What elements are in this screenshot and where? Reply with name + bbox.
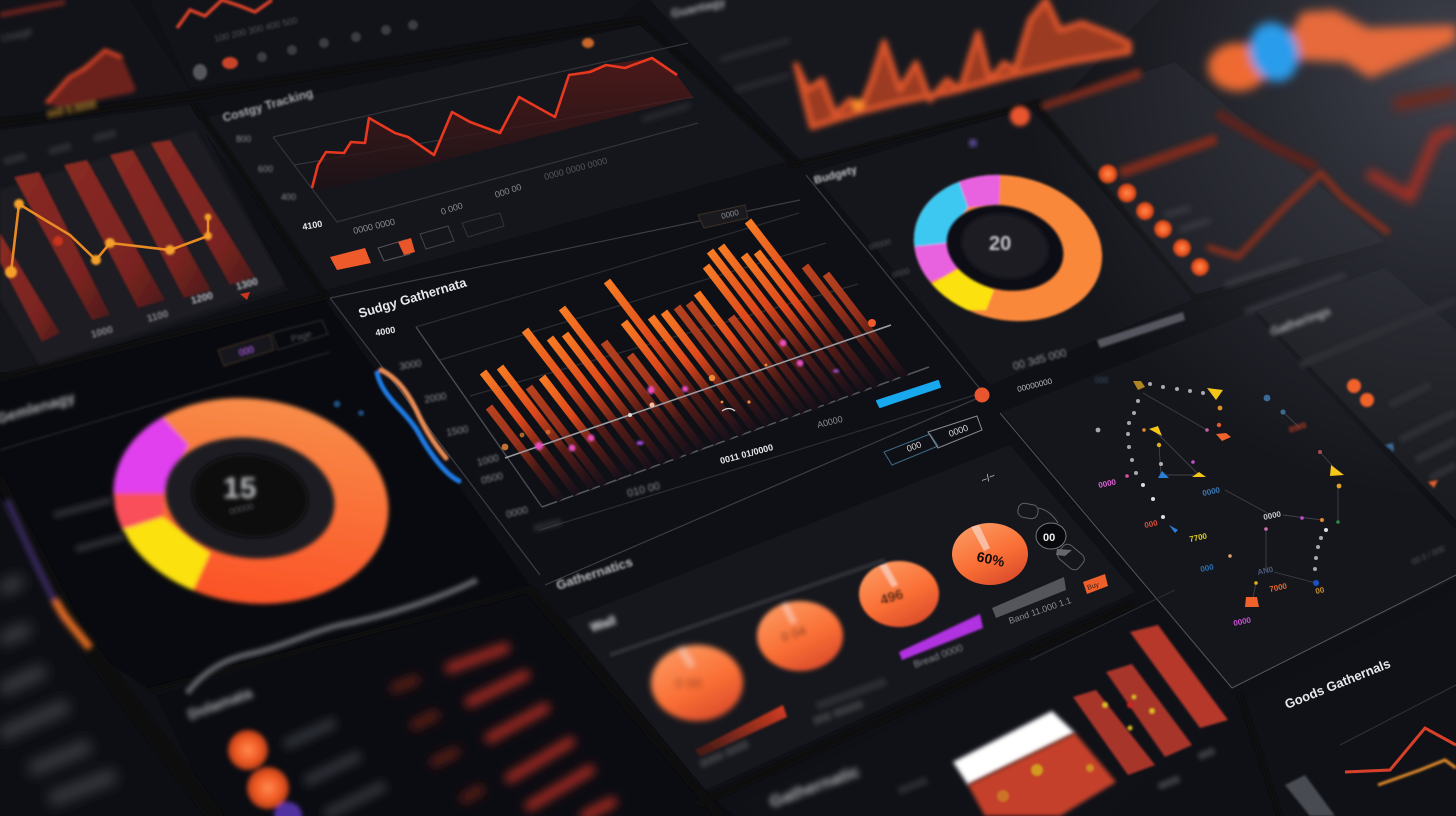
panel: far top-right capsule <box>1208 10 1456 197</box>
y-axis labels: 2000 <box>424 391 448 406</box>
node labels: 0000 <box>1263 509 1282 522</box>
panel: top strip line chart: 100 200 300 400 500 <box>213 15 298 44</box>
panel: network diagram: 00 0 / 000 <box>1410 544 1447 567</box>
panel: bottom bars: 0000 <box>1157 774 1182 793</box>
panel: main bar chart: 000 <box>905 439 923 454</box>
panel: main bar chart: 0000 <box>947 423 970 439</box>
axis and tabs: 800 <box>236 134 251 144</box>
blurred side labels <box>53 496 125 553</box>
magenta top segment <box>955 170 1000 207</box>
baseline <box>505 325 891 458</box>
data points <box>535 340 839 451</box>
panel: bottom-left list <box>186 580 612 816</box>
heading: Gathernatic <box>767 762 862 812</box>
orange dot <box>1010 106 1030 126</box>
panel: orange progress orbs: 000000000000 <box>815 676 888 713</box>
wave accent: ~/~ <box>980 471 998 487</box>
orb 1 <box>651 645 743 721</box>
panel: main bar chart: 0000 <box>720 208 740 221</box>
heading: Goods Gathernals <box>1283 656 1393 712</box>
red line <box>312 58 677 188</box>
yellow segment <box>930 267 994 310</box>
panel: small donut: 0000 <box>891 266 911 280</box>
panel: top strip line chart <box>177 0 594 80</box>
y-axis labels: 0500 <box>480 471 505 487</box>
node labels: 000 <box>1200 562 1215 574</box>
axis and tabs: 0000 0000 <box>352 217 396 236</box>
tabs: Page <box>290 329 313 344</box>
y-axis labels: 1500 <box>446 424 470 439</box>
panel: small donut: Budgety <box>813 164 859 187</box>
chart title: Costgy Tracking <box>221 86 315 125</box>
x-axis labels: 0011 01/0000 <box>719 442 774 466</box>
toggle buttons <box>884 416 982 465</box>
panel: right list: Gatherings <box>1268 304 1333 339</box>
red pills <box>395 648 612 816</box>
grey trend line <box>187 580 477 693</box>
x-axis labels <box>533 414 844 535</box>
axis and tabs: 600 <box>258 164 273 174</box>
x-axis labels: 00000 <box>533 517 563 535</box>
node labels: 7000 <box>1269 581 1288 594</box>
heatmap block: red body <box>968 733 1116 816</box>
connector outlines <box>1017 502 1087 572</box>
orange dots <box>228 730 302 816</box>
panel: bottom bars <box>767 625 1228 816</box>
panel: striped bar chart with line <box>0 128 285 365</box>
panel: orange progress orbs: 0000 0000 <box>698 739 751 771</box>
axis and tabs <box>236 134 608 236</box>
panel: top-right area chart <box>642 0 1142 127</box>
panel: top-left mini area chart: Usage <box>0 26 34 45</box>
panel: striped bar chart with line: 1000 <box>90 324 115 341</box>
x-axis labels: 010 00 <box>626 480 661 500</box>
tag top <box>698 205 748 228</box>
orange bars <box>483 221 905 500</box>
node labels: 0000 <box>1098 477 1117 490</box>
heatmap block: white top <box>953 711 1075 785</box>
panel: top line chart <box>221 43 698 270</box>
axis and tabs: 000 00 <box>494 182 523 200</box>
progress: grey <box>992 577 1066 618</box>
panel: orange progress orbs: 00 <box>1043 532 1055 544</box>
panel: main bar chart <box>330 175 998 585</box>
panel frame <box>330 175 985 585</box>
node labels: 0000 <box>1288 421 1308 435</box>
inner disc <box>187 447 313 545</box>
panel: striped bar chart with line: 1200 <box>190 290 215 307</box>
orange tag <box>1083 574 1108 594</box>
panel: right list <box>1268 300 1456 488</box>
magenta segment <box>100 415 188 493</box>
markers <box>1149 388 1344 477</box>
magenta lower segment <box>913 242 959 284</box>
small nodes <box>1125 395 1341 586</box>
panel: striped bar chart with line: 1100 <box>146 309 170 325</box>
grey rows <box>285 722 385 815</box>
axis and tabs: 0 000 <box>440 200 464 217</box>
orb 2 <box>757 601 843 671</box>
orb captions: Bread 0000 <box>912 643 965 671</box>
orb 3 <box>859 561 939 627</box>
line area <box>312 58 693 192</box>
y-axis labels: 0000 <box>505 505 530 521</box>
panel: right dot list chart <box>1098 113 1389 312</box>
panel: large donut <box>0 320 402 621</box>
node labels: AN0 <box>1257 565 1275 577</box>
donut hole <box>157 427 343 569</box>
main chart title: Sudgy Gathernata <box>357 274 469 321</box>
y-axis labels: 3000 <box>399 358 423 373</box>
panel: small donut: 00000000 <box>1016 376 1054 394</box>
pink segment <box>112 491 166 532</box>
tabs: 000 <box>238 344 255 358</box>
panel: orange progress orbs <box>554 502 1108 771</box>
node labels: 00 <box>1315 585 1326 596</box>
grid lines <box>416 213 929 507</box>
cyan segment <box>912 180 970 248</box>
orb 1: 0 00 <box>675 675 702 691</box>
heading: Dolamata <box>186 684 255 724</box>
panel: left strip <box>0 500 115 800</box>
panel: striped bar chart with line: 0000 <box>3 151 28 168</box>
row of dots <box>257 20 418 62</box>
panel: orange progress orbs: 000 00000 <box>812 699 865 728</box>
node labels: 7700 <box>1189 531 1208 544</box>
donut ring <box>110 394 392 608</box>
panel: top-left mini area chart <box>0 2 135 121</box>
section heading: Gathernatics <box>554 554 635 593</box>
pill with value <box>1036 523 1066 549</box>
y-axis labels: 4000 <box>375 325 396 338</box>
bright frame lines <box>1000 413 1456 688</box>
orb 2: 0 04 <box>779 623 808 645</box>
panel: bottom-right line chart <box>1283 656 1456 816</box>
legend: 00 3d5 000 <box>1012 347 1068 373</box>
highlights <box>997 694 1155 802</box>
node labels: 000 <box>1144 518 1159 530</box>
panel: network diagram <box>1000 376 1456 688</box>
y-axis labels <box>375 325 530 521</box>
panel: network diagram: 000 <box>1095 376 1109 385</box>
orb 4 <box>952 523 1028 585</box>
panel: small donut: 00000 <box>868 237 892 252</box>
donut value: 15 <box>223 472 256 505</box>
panel: bottom bars: 000 <box>1197 746 1217 763</box>
panel: orange progress orbs: 60% <box>975 548 1007 570</box>
panel: blue orange curve <box>377 370 459 481</box>
panel: small donut <box>813 139 1185 394</box>
axis and tabs: 0000 0000 0000 <box>543 155 608 182</box>
links <box>1143 393 1338 602</box>
panel: orange progress orbs: Band 11.000 1.1 <box>1007 595 1072 626</box>
blue pill <box>877 381 940 407</box>
x-axis labels: A0000 <box>816 414 844 430</box>
yellow segment <box>100 517 210 590</box>
tabs <box>218 320 328 366</box>
progress: red <box>695 705 787 757</box>
panel: striped bar chart with line: 0000 <box>48 141 73 158</box>
panel: large donut: 00000 <box>228 501 255 517</box>
node labels: 0000 <box>1202 485 1221 498</box>
node labels: 0000 <box>1233 615 1252 628</box>
panel: striped bar chart with line: 0000 <box>93 128 118 145</box>
panel: small donut: 20 <box>989 233 1011 255</box>
orb 3: 496 <box>878 585 905 608</box>
orange node <box>974 388 990 402</box>
panel: striped bar chart with line: 1300 <box>235 276 260 293</box>
panel label: Wall <box>588 612 618 635</box>
y-axis labels: 1000 <box>476 453 501 469</box>
inner ring <box>939 195 1071 301</box>
node labels <box>1098 421 1326 628</box>
panel: bottom bars: 00000 <box>897 775 929 798</box>
progress: purple <box>899 614 983 660</box>
axis and tabs: 4100 <box>302 219 323 232</box>
panel: orange progress orbs: Buy <box>1086 581 1101 592</box>
axis and tabs: 400 <box>281 192 296 202</box>
grey dots <box>1096 382 1328 571</box>
panel: top-left mini area chart: 000 0.0000 <box>46 100 98 121</box>
